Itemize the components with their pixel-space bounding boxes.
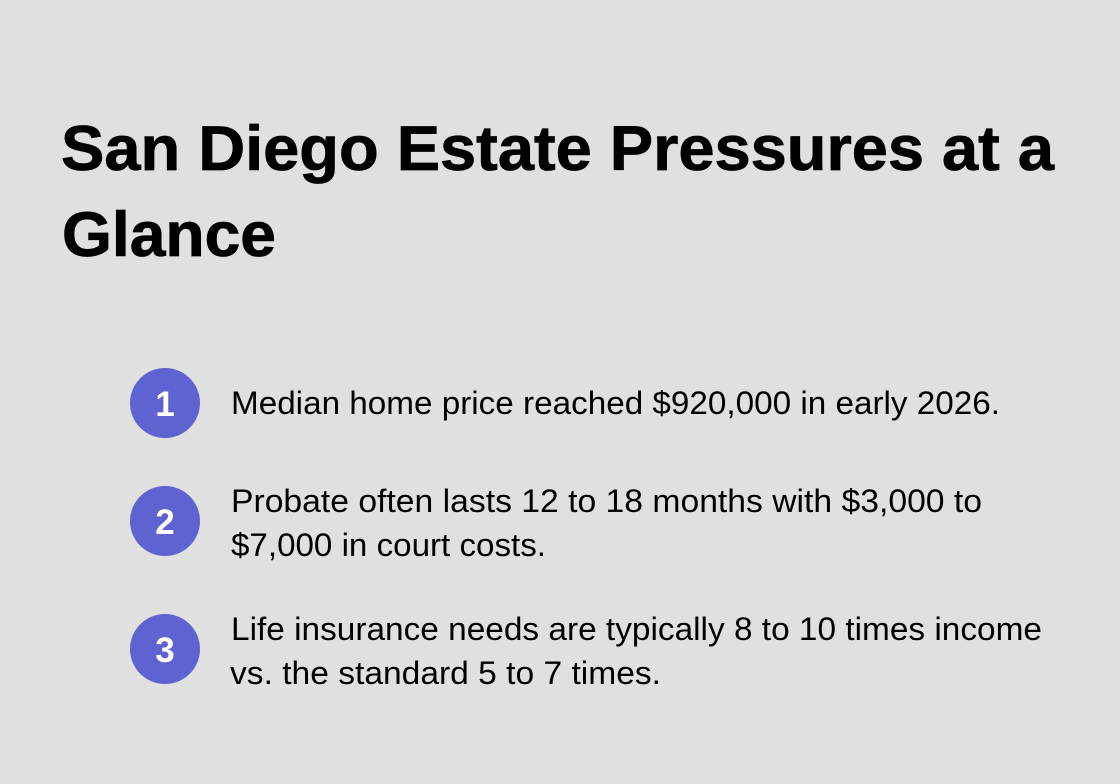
list item 2: probate bbox=[130, 483, 982, 563]
title bbox=[61, 114, 1055, 270]
title: Glance bbox=[62, 200, 276, 270]
title: San Diego Estate Pressures at a bbox=[61, 114, 1055, 184]
text: median home price: Median home price reached $920,000 in early 2026. bbox=[231, 385, 1000, 421]
number badge 2: 2 bbox=[155, 503, 175, 542]
number badge 1 bbox=[130, 368, 200, 438]
text: life insurance needs bbox=[230, 611, 1042, 691]
text: probate duration and costs bbox=[231, 483, 982, 563]
text: life insurance needs: Life insurance needs are typically 8 to 10 times income bbox=[231, 611, 1042, 647]
text: probate duration and costs: $7,000 in court costs. bbox=[231, 527, 546, 563]
list item 1: median home price bbox=[130, 368, 1000, 438]
number badge 3: 3 bbox=[155, 631, 175, 670]
number badge 2 bbox=[130, 486, 200, 556]
text: life insurance needs: vs. the standard 5 to 7 times. bbox=[230, 655, 661, 691]
number badge 1: 1 bbox=[155, 385, 175, 424]
number badge 3 bbox=[130, 614, 200, 684]
text: probate duration and costs: Probate often lasts 12 to 18 months with $3,000 to bbox=[231, 483, 982, 519]
list item 3: life insurance bbox=[130, 611, 1042, 691]
